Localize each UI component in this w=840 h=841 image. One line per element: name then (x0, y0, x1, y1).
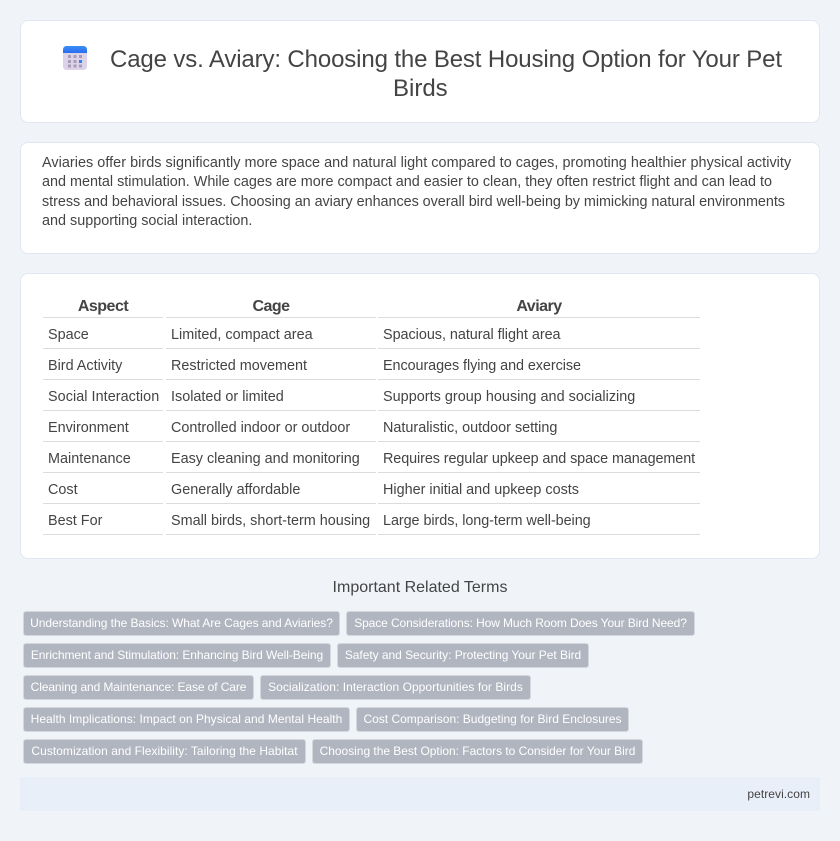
comparison table: Higher initial and upkeep costs (383, 482, 579, 498)
title: Cage vs. Aviary: Choosing the Best Housing Option for Your Pet (110, 46, 782, 73)
table header: Cage (252, 298, 290, 315)
related term tags (23, 611, 695, 764)
related term tags: Cost Comparison: Budgeting for Bird Enclosures (363, 712, 622, 726)
title (110, 46, 782, 102)
comparison table: Best For (48, 513, 102, 529)
header panel (20, 20, 820, 123)
footer bar (20, 777, 820, 811)
title: Birds (393, 75, 448, 102)
panel: intro (20, 142, 820, 254)
related term tags: Enrichment and Stimulation: Enhancing Bird Well-Being (31, 648, 323, 662)
comparison table: Restricted movement (171, 358, 307, 374)
comparison table: Encourages flying and exercise (383, 358, 581, 374)
intro text: Aviaries offer birds significantly more space and natural light compared to cages, promoting healthier physical activity (42, 155, 791, 171)
footer: source: petrevi.com (747, 787, 810, 801)
related term tags: Socialization: Interaction Opportunities for Birds (268, 680, 523, 694)
comparison table: Isolated or limited (171, 389, 284, 405)
comparison table: Spacious, natural flight area (383, 327, 561, 343)
table header (78, 298, 562, 315)
related term tags: Safety and Security: Protecting Your Pet Bird (345, 648, 581, 662)
comparison table: Small birds, short-term housing (171, 513, 370, 529)
comparison table: Requires regular upkeep and space management (383, 451, 695, 467)
comparison table: Social Interaction (48, 389, 159, 405)
related term tags: Choosing the Best Option: Factors to Consider for Your Bird (320, 744, 635, 758)
related term tags: Health Implications: Impact on Physical and Mental Health (31, 712, 342, 726)
panel: comparison table (20, 273, 820, 559)
intro text: stress and behavioral issues. Choosing an aviary enhances overall bird well-being by mimicking natural environments (42, 194, 785, 210)
heading: related terms: Important Related Terms (333, 579, 507, 596)
comparison table: Easy cleaning and monitoring (171, 451, 360, 467)
comparison table: Cost (48, 482, 78, 498)
related term tags: Understanding the Basics: What Are Cages and Aviaries? (30, 616, 333, 630)
comparison table: Bird Activity (48, 358, 122, 374)
comparison table: Naturalistic, outdoor setting (383, 420, 557, 436)
table header: Aspect (78, 298, 128, 315)
related term tags: Cleaning and Maintenance: Ease of Care (31, 680, 246, 694)
related term tags: Customization and Flexibility: Tailoring the Habitat (31, 744, 298, 758)
comparison table: Generally affordable (171, 482, 300, 498)
icon: calendar (63, 46, 87, 70)
comparison table: Controlled indoor or outdoor (171, 420, 350, 436)
comparison table (43, 298, 700, 535)
intro text: and supporting social interaction. (42, 213, 252, 229)
comparison table: Supports group housing and socializing (383, 389, 635, 405)
intro text (42, 155, 792, 229)
related term tags: Space Considerations: How Much Room Does Your Bird Need? (354, 616, 687, 630)
comparison table: Maintenance (48, 451, 131, 467)
intro text: and mental stimulation. While cages are more compact and easier to clean, they often restrict flight and can lead to (42, 174, 772, 190)
comparison table: Large birds, long-term well-being (383, 513, 591, 529)
comparison table: Environment (48, 420, 129, 436)
table header: Aviary (516, 298, 562, 315)
comparison table: Limited, compact area (171, 327, 313, 343)
comparison table: Space (48, 327, 89, 343)
